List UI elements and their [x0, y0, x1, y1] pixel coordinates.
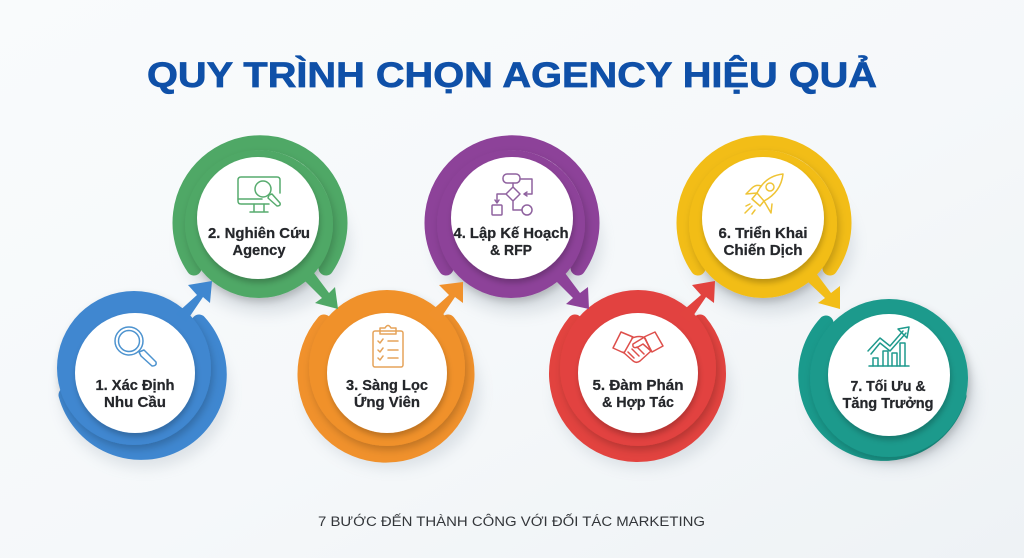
step 2 ring [180, 143, 340, 298]
step 7 label: 7. Tối Ưu & [850, 378, 926, 395]
step 3 ring [305, 290, 467, 455]
arrow from step 2 to step 3 [304, 273, 338, 309]
icon: flowchart [492, 174, 532, 215]
step 3 label: Ứng Viên [354, 393, 420, 411]
step 5 label: 5. Đàm Phán [592, 377, 684, 394]
step 3 label: 3. Sàng Lọc [346, 377, 428, 394]
step 6 ring [684, 143, 844, 298]
step 7 label [842, 378, 934, 412]
step 5 label: & Hợp Tác [602, 394, 674, 411]
step 7: Tối Ưu & Tăng Trưởng [806, 299, 976, 468]
step 3 white disc [327, 313, 447, 433]
step 2 label [208, 225, 310, 259]
step 1 label: Nhu Cầu [104, 394, 166, 411]
step 1 ring [57, 291, 219, 452]
step 5 ring [556, 290, 718, 455]
step 7 white disc [828, 314, 950, 436]
step 2: Nghiên Cứu Agency [180, 143, 350, 314]
step 1 label [96, 377, 174, 411]
arrow from step 1 to step 2 [176, 281, 212, 322]
step 3: Sàng Lọc Ứng Viên [304, 290, 480, 468]
step 4 label: 4. Lập Kế Hoạch [454, 225, 568, 242]
step 4 ring [432, 143, 592, 298]
step 6 white disc [702, 157, 824, 279]
step 5 label [592, 377, 684, 411]
step 7 label: Tăng Trưởng [842, 395, 934, 412]
step 3 label [346, 377, 428, 411]
step 1 white disc [75, 313, 195, 433]
arrow from step 3 to step 4 [428, 282, 463, 322]
step 2 label: Agency [232, 242, 286, 259]
step 6 label: Chiến Dịch [724, 242, 802, 259]
icon: monitor search [238, 177, 280, 212]
step 4 label [454, 225, 568, 259]
footer caption: 7 BƯỚC ĐẾN THÀNH CÔNG VỚI ĐỐI TÁC MARKETING [318, 514, 705, 529]
step 1: Xác Định Nhu Cầu [57, 291, 229, 468]
step 6: Triển Khai Chiến Dịch [684, 143, 854, 314]
step 4 label: & RFP [490, 242, 532, 259]
icon: clipboard checklist [373, 326, 403, 367]
step 4: Lập Kế Hoạch & RFP [432, 143, 602, 314]
step 6 label: 6. Triển Khai [718, 225, 808, 242]
arrow from step 4 to step 5 [555, 273, 589, 309]
step 5 white disc [578, 313, 698, 433]
icon: growth chart [868, 327, 909, 366]
step 2 white disc [197, 157, 319, 279]
arrow from step 5 to step 6 [679, 281, 715, 322]
step 6 label [718, 225, 808, 259]
icon: rocket [745, 174, 783, 214]
icon: handshake [613, 332, 663, 362]
arrow from step 6 to step 7 [806, 273, 840, 309]
step 5: Đàm Phán & Hợp Tác [555, 290, 731, 468]
step 1 label: 1. Xác Định [96, 377, 174, 394]
title: QUY TRÌNH CHỌN AGENCY HIỆU QUẢ [147, 55, 877, 95]
step 2 label: 2. Nghiên Cứu [208, 225, 310, 242]
step 4 white disc [451, 157, 573, 279]
icon: magnifier [115, 327, 156, 366]
step 7 ring [806, 299, 968, 457]
